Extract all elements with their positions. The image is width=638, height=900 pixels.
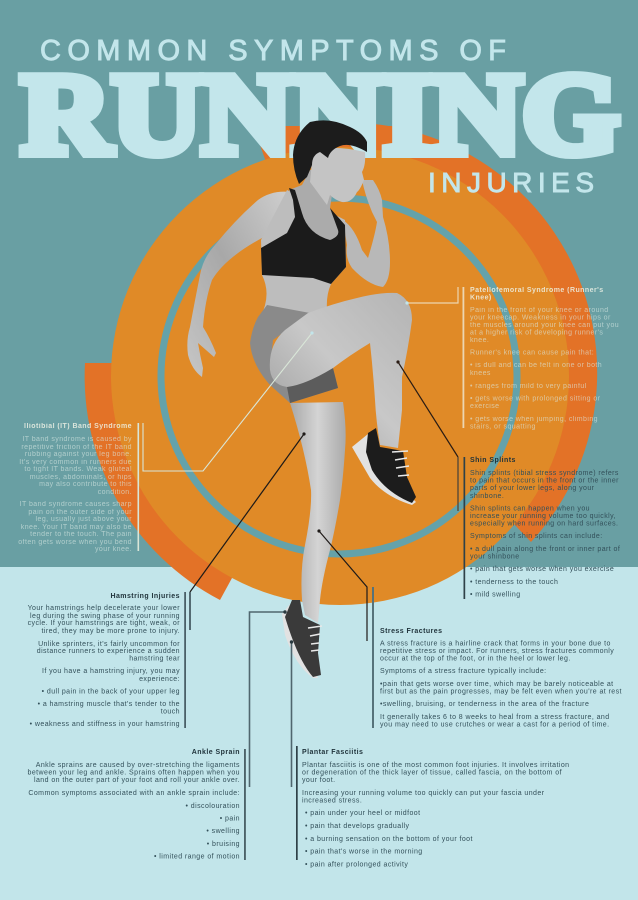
body text: repetitive stress or impact. For runners, stress fractures commonly — [380, 648, 614, 655]
panel: iliotibial band syndrome — [18, 423, 139, 553]
body text: Plantar fasciitis is one of the most common foot injuries. It involves irritation — [302, 762, 569, 769]
body text: or degeneration of the thick layer of tissue, called fascia, on the bottom of — [302, 770, 562, 776]
body text: • ranges from mild to very painful — [470, 383, 587, 390]
background: pale blue lower section — [0, 567, 638, 900]
heading: Ankle Sprain — [192, 749, 240, 756]
panel: stress fractures — [372, 587, 622, 728]
heading: Shin Splints — [470, 457, 516, 464]
figure: female runner — [187, 120, 416, 678]
body text: • swelling — [206, 828, 240, 835]
body text: knee. — [470, 337, 489, 344]
heading: Knee) — [470, 294, 492, 302]
heading: Hamstring Injuries — [110, 593, 180, 600]
body text: parts of your lower legs, along your — [470, 485, 595, 492]
body text: •pain that gets worse over time, which may be barely noticeable at — [380, 681, 614, 688]
body text: •swelling, bruising, or tenderness in the area of the fracture — [380, 701, 589, 708]
body text: Symptoms of shin splints can include: — [470, 533, 603, 540]
body text: condition. — [98, 489, 132, 496]
body text: If you have a hamstring injury, you may — [42, 668, 180, 675]
body text: IT band syndrome causes sharp — [20, 501, 132, 508]
body text: • limited range of motion — [154, 854, 240, 860]
body text: • a hamstring muscle that's tender to the — [38, 701, 180, 708]
background: teal upper section — [0, 0, 638, 567]
face — [310, 148, 365, 205]
pointer: patellofemoral — [405, 287, 458, 305]
body text: pain on the outer side of your — [28, 509, 132, 516]
standing leg — [290, 402, 346, 623]
body text — [28, 762, 240, 860]
body text: • pain that develops gradually — [305, 823, 410, 830]
body text: especially when running on hard surfaces. — [470, 520, 618, 528]
body text: exercise — [470, 403, 500, 410]
body text: your shinbone — [470, 554, 520, 560]
body text: distance runners to experience a sudden — [37, 648, 180, 655]
body text: • weakness and stiffness in your hamstring — [30, 721, 180, 728]
body text: tired, they may be more prone to injury. — [42, 628, 180, 635]
body text: hamstring tear — [129, 656, 180, 662]
body text: Runner's knee can cause pain that: — [470, 350, 594, 356]
body text: your knee. — [95, 546, 132, 553]
body text — [18, 436, 132, 553]
sports bra — [261, 188, 346, 284]
body text: often gets worse when you bend — [18, 539, 132, 546]
pointer: plantar fasciitis — [290, 640, 293, 787]
body text: to tight IT bands. Weak gluteal — [24, 466, 132, 473]
body text: Pain in the front of your knee or around — [470, 307, 609, 314]
hair — [293, 120, 367, 184]
pointer: shin splints — [396, 360, 459, 511]
body text: Unlike sprinters, it's fairly uncommon for — [38, 641, 180, 648]
body text: the muscles around your knee can put you — [470, 322, 619, 329]
panel: hamstring injuries — [28, 592, 186, 728]
body text: Your hamstrings help decelerate your lower — [28, 605, 180, 612]
pointer: hamstring — [189, 432, 306, 630]
heading: Plantar Fasciitis — [302, 749, 363, 756]
body text: knee. Your IT band may also be — [21, 524, 132, 531]
body text: cycle. If your hamstrings are tight, weak, or — [28, 620, 180, 627]
body text: land on the outer part of your foot and roll your ankle over. — [34, 777, 240, 784]
shorts — [250, 305, 338, 403]
title: COMMON SYMPTOMS OF — [40, 35, 506, 67]
front arm — [343, 180, 390, 287]
body text: • mild swelling — [470, 592, 521, 598]
body text: • tenderness to the touch — [470, 579, 558, 586]
body text: first but as the pain progresses, may be felt even when you're at rest — [380, 688, 622, 696]
lower shoe — [282, 600, 322, 678]
body text: • gets worse with prolonged sitting or — [470, 396, 601, 402]
body text: IT band syndrome is caused by — [22, 436, 132, 443]
body text: • gets worse when jumping, climbing — [470, 416, 598, 423]
body text: touch — [161, 708, 180, 716]
back arm — [187, 192, 290, 377]
panel: patellofemoral syndrome — [462, 287, 619, 430]
pointer: stress fractures — [317, 529, 367, 641]
torso — [260, 190, 346, 318]
heading: Patellofemoral Syndrome (Runner's — [470, 287, 604, 294]
body text: Shin splints (tibial stress syndrome) refers — [470, 470, 619, 477]
body text: muscles, abdominals, or hips — [30, 474, 132, 481]
body text: • pain that gets worse when you exercise — [470, 566, 614, 573]
body text: increased stress. — [302, 798, 362, 804]
panel: plantar fasciitis — [296, 746, 569, 868]
raised shoe — [352, 428, 416, 505]
body text: It generally takes 6 to 8 weeks to heal from a stress fracture, and — [380, 714, 610, 721]
body text: your kneecap. Weakness in your hips or — [470, 314, 611, 322]
body text: A stress fracture is a hairline crack that forms in your bone due to — [380, 640, 611, 648]
panel: shin splints — [464, 457, 620, 599]
shorts hem shadow — [287, 368, 338, 403]
body text: you may need to use crutches or wear a cast for a period of time. — [380, 722, 610, 728]
body text — [380, 640, 622, 728]
pointer: IT band — [143, 331, 314, 471]
body text: • bruising — [207, 841, 240, 848]
body text: your foot. — [302, 777, 335, 784]
body text: • pain — [220, 816, 240, 822]
body text: Symptoms of a stress fracture typically include: — [380, 668, 547, 675]
body text — [302, 762, 569, 868]
heading: Stress Fractures — [380, 628, 442, 635]
panel: ankle sprain — [28, 749, 246, 860]
body text — [470, 470, 620, 598]
body text: between your leg and ankle. Sprains often happen when you — [28, 770, 240, 776]
body text: • pain after prolonged activity — [305, 862, 408, 868]
body text: knees — [470, 370, 491, 377]
body text: leg during the swing phase of your running — [30, 613, 180, 620]
body text: repetitive friction of the IT band — [21, 444, 132, 451]
title: RUNNING — [21, 50, 620, 179]
body text: to pain that occurs in the front or the inner — [470, 478, 619, 484]
body text: • pain that's worse in the morning — [305, 848, 423, 856]
body text: • a dull pain along the front or inner part of — [470, 546, 620, 553]
body text: • pain under your heel or midfoot — [305, 810, 420, 817]
body text: Common symptoms associated with an ankle sprain include: — [28, 790, 240, 797]
title: INJURIES — [428, 167, 594, 198]
body text — [470, 307, 619, 430]
body text: • dull pain in the back of your upper leg — [42, 688, 180, 696]
body text: leg, usually just above your — [36, 516, 132, 523]
heading: Iliotibial (IT) Band Syndrome — [24, 423, 132, 430]
neck and chest — [289, 170, 339, 240]
body text: Ankle sprains are caused by over-stretching the ligaments — [36, 762, 240, 769]
body text: occur at the top of the foot, or in the heel or lower leg. — [380, 656, 571, 662]
raised leg — [270, 293, 412, 448]
body text: increase your running volume too quickly, — [470, 513, 616, 520]
body text: stairs, or squatting — [470, 424, 536, 430]
body text: It's very common in runners due — [19, 459, 132, 466]
pointer: ankle sprain — [250, 610, 287, 787]
body text: • a burning sensation on the bottom of your foot — [305, 836, 473, 843]
body text: • discolouration — [186, 803, 240, 810]
body text — [28, 605, 180, 728]
body text: • is dull and can be felt in one or both — [470, 362, 602, 369]
body text: experience: — [139, 676, 180, 683]
body text: may also contribute to this — [39, 481, 132, 488]
body text: tender to the touch. The pain — [30, 531, 132, 538]
body text: shinbone. — [470, 493, 504, 500]
body text: at a higher risk of developing runner's — [470, 330, 603, 336]
graphic: concentric orange circles — [85, 123, 597, 605]
body text: Increasing your running volume too quickly can put your fascia under — [302, 790, 545, 797]
body text: Shin splints can happen when you — [470, 506, 590, 512]
body text: rubbing against your leg bone. — [25, 451, 132, 458]
